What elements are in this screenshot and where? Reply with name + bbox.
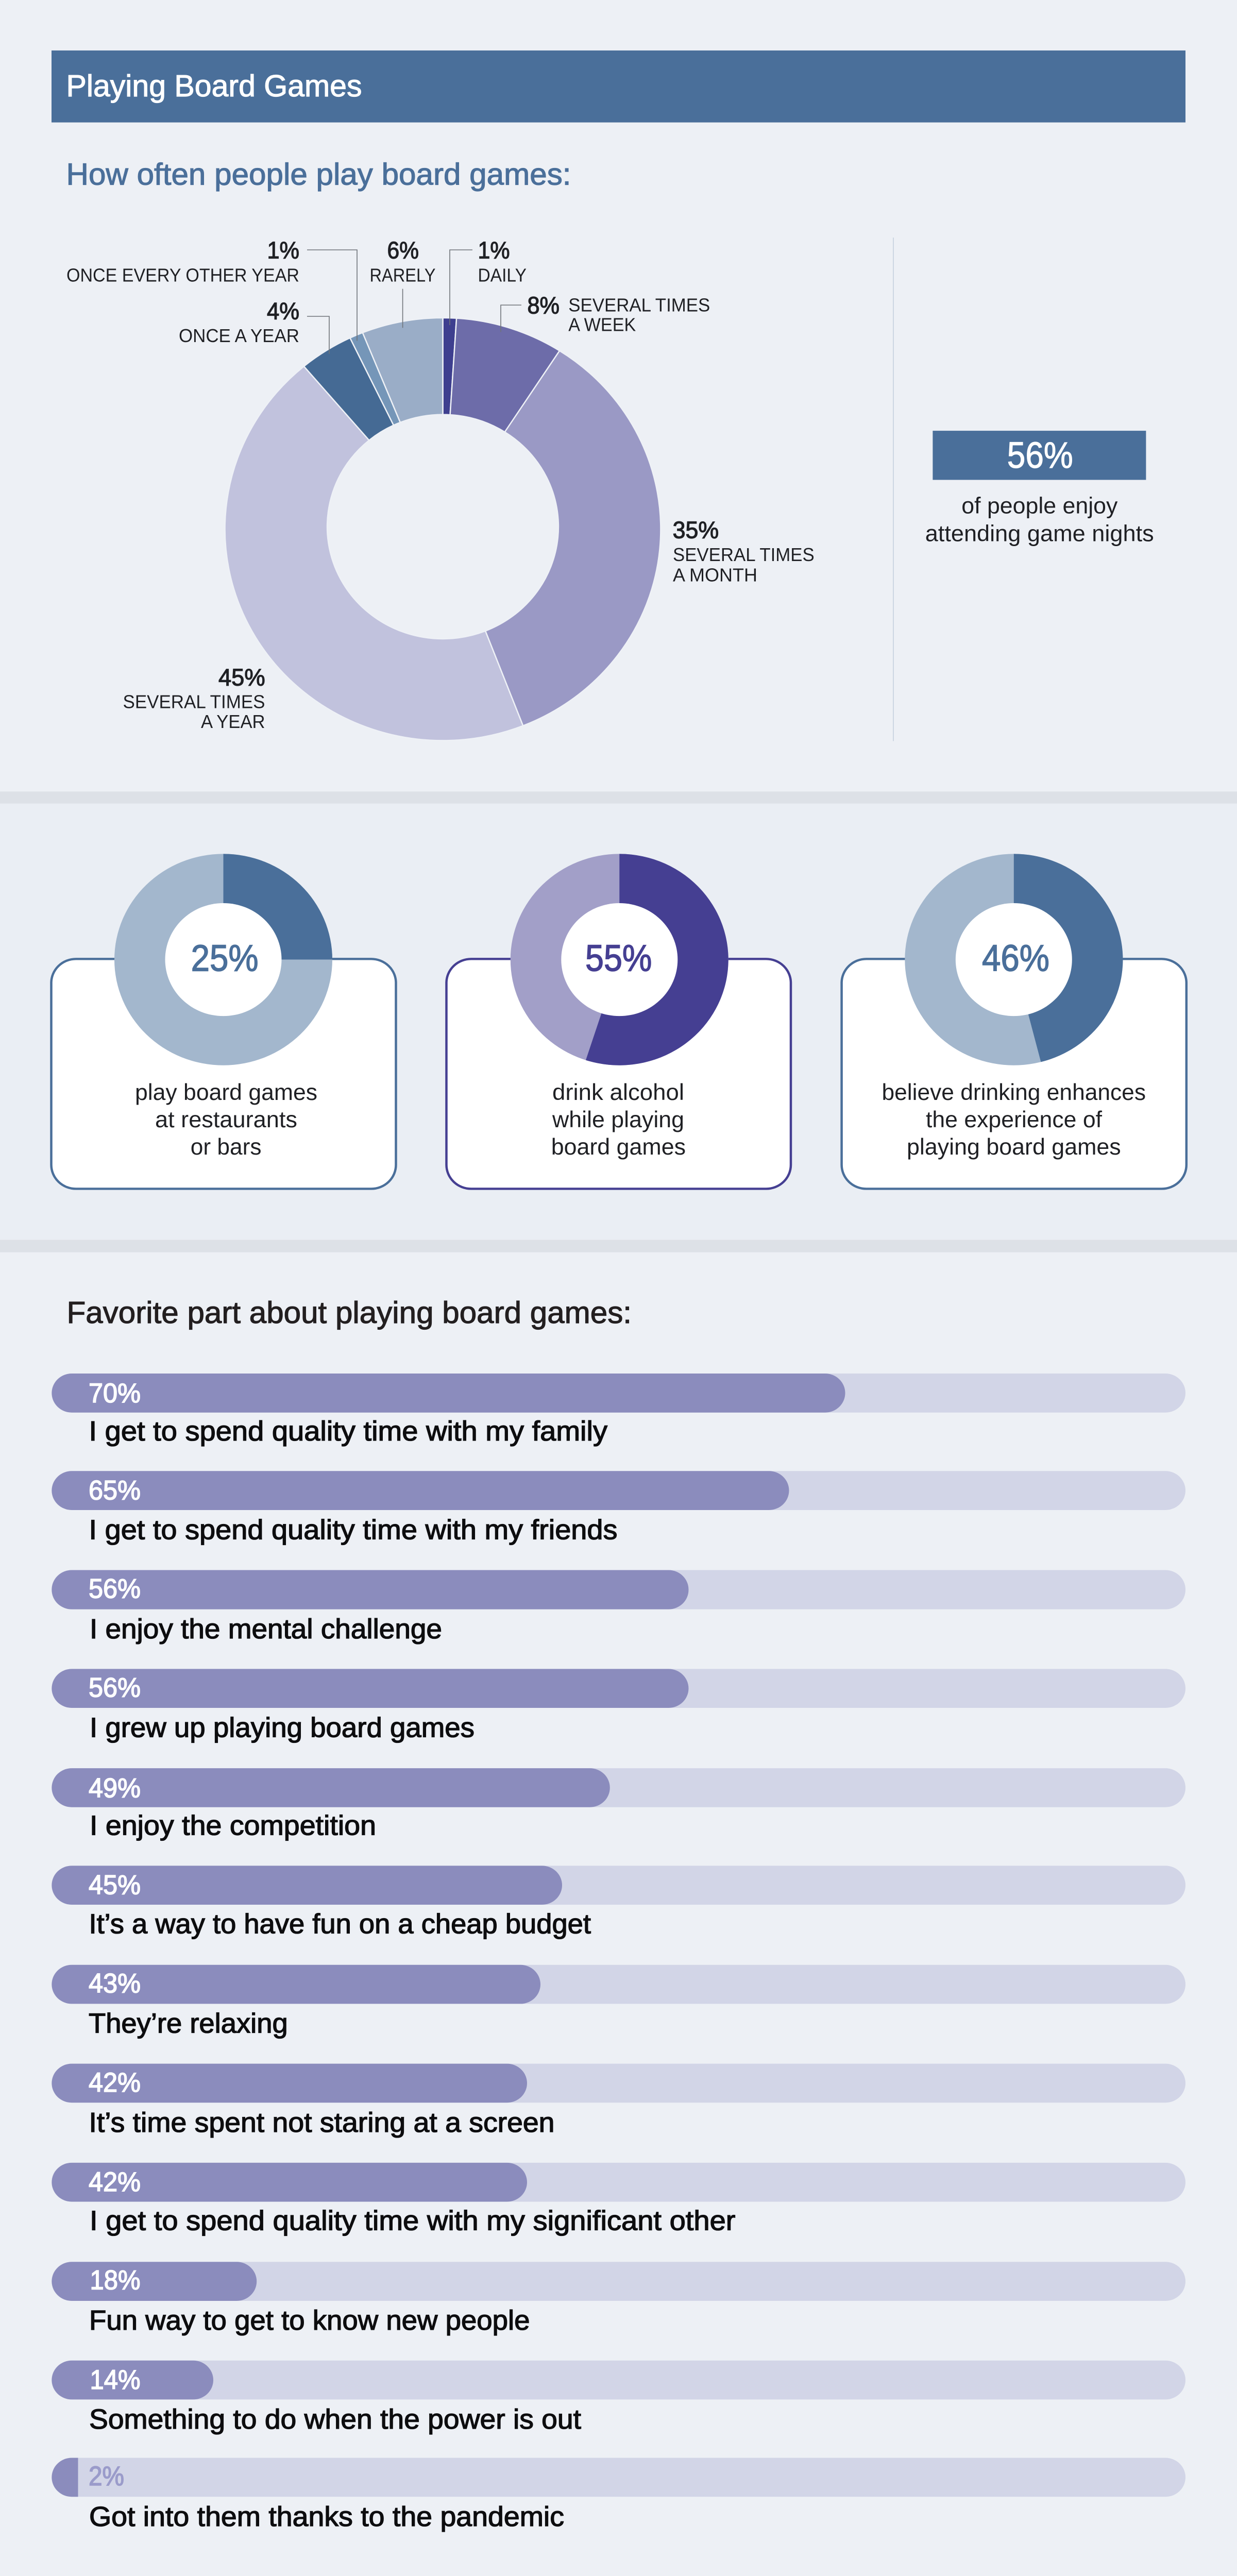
bar: 42% not staring at a screen: It’s time spent not staring at a screen <box>89 2108 554 2138</box>
description <box>882 1079 1146 1160</box>
card <box>842 959 1187 1189</box>
value: 46% <box>982 937 1049 979</box>
label: once every other year <box>66 237 357 341</box>
bar: 45% cheap budget: 45% <box>89 1870 141 1901</box>
bar: 65% friends <box>52 1471 1185 1545</box>
label: rarely: RARELY <box>370 265 435 285</box>
bar: 70% family: 70% <box>89 1379 141 1409</box>
title banner: Playing Board Games <box>66 69 362 103</box>
label: daily: DAILY <box>478 265 527 285</box>
donut labels and leader lines <box>66 237 815 732</box>
bar: 45% cheap budget: It’s a way to have fun on a cheap budget <box>89 1909 591 1939</box>
donut 25% <box>114 854 332 1065</box>
slice: several times a year 45% <box>225 366 523 740</box>
callout: 56% game nights: attending game nights <box>925 520 1154 547</box>
heading: favorite part: Favorite part about playing board games: <box>67 1296 632 1330</box>
label: rarely <box>370 237 436 328</box>
bar: 14% power out: Something to do when the power is out <box>89 2404 581 2435</box>
label: once a year: 4% <box>267 298 299 325</box>
bar: 49% competition: I enjoy the competition <box>90 1810 376 1841</box>
description: or bars <box>191 1134 261 1160</box>
description: while playing <box>552 1107 684 1132</box>
bar: 14% power out <box>52 2361 1185 2435</box>
bar: 43% relaxing: 43% <box>89 1969 141 1998</box>
bar: 56% mental challenge <box>52 1570 1185 1645</box>
label: several times a week: A WEEK <box>568 314 636 335</box>
label: several times a week: 8% <box>528 292 560 319</box>
label: once a year <box>179 298 329 354</box>
label: several times a week <box>501 292 710 335</box>
bar: 2% pandemic: Got into them thanks to the pandemic <box>89 2502 564 2532</box>
bar: 45% cheap budget <box>52 1866 1185 1939</box>
label: once a year: ONCE A YEAR <box>179 326 299 346</box>
bar: 49% competition: 49% <box>89 1773 141 1803</box>
callout: 56% game nights <box>925 431 1154 547</box>
bar: 14% power out: 14% <box>90 2365 140 2395</box>
panel: restaurants or bars 25% <box>52 854 396 1189</box>
bar: 43% relaxing <box>52 1965 1185 2039</box>
donut 55% <box>511 854 728 1065</box>
bar: 42% significant other: I get to spend quality time with my significant other <box>90 2206 736 2236</box>
label: once every other year: ONCE EVERY OTHER YEAR <box>66 265 299 285</box>
card <box>52 959 396 1189</box>
description: drink alcohol <box>552 1079 684 1105</box>
bar: 18% new people <box>52 2262 1185 2336</box>
label: several times a month: SEVERAL TIMES <box>673 544 815 565</box>
description: board games <box>551 1134 686 1160</box>
description: believe drinking enhances <box>882 1079 1146 1105</box>
card <box>446 959 791 1189</box>
description: playing board games <box>907 1134 1121 1160</box>
description: play board games <box>135 1079 317 1105</box>
label: several times a month <box>673 517 815 585</box>
title banner <box>52 50 1185 123</box>
bar: 56% grew up: 56% <box>89 1673 141 1703</box>
bar: 49% competition <box>52 1768 1185 1841</box>
value: 25% <box>191 937 259 979</box>
bar: 56% mental challenge: I enjoy the mental challenge <box>90 1614 442 1645</box>
label: once every other year: 1% <box>267 237 299 264</box>
label: several times a year: A YEAR <box>201 711 265 732</box>
bar: 70% family: I get to spend quality time with my family <box>89 1416 607 1447</box>
bar: 56% grew up: I grew up playing board games <box>90 1713 475 1743</box>
slice: daily 1% <box>443 318 456 415</box>
bar: 70% family <box>52 1374 1185 1447</box>
bar: 42% not staring at a screen: 42% <box>89 2068 141 2098</box>
description <box>551 1079 686 1160</box>
description: the experience of <box>926 1107 1102 1132</box>
label: several times a month: A MONTH <box>673 565 757 585</box>
value: 55% <box>585 937 652 979</box>
heading: how often people play: How often people play board games: <box>66 157 571 191</box>
bar: 2% pandemic: 2% <box>89 2462 124 2492</box>
label: daily <box>450 237 527 325</box>
bar: 42% significant other: 42% <box>89 2167 141 2197</box>
label: several times a month: 35% <box>673 517 719 544</box>
donut 46% <box>905 854 1123 1065</box>
bar: 56% grew up <box>52 1669 1185 1743</box>
callout: 56% game nights: 56% <box>1007 435 1073 476</box>
bar: 65% friends: 65% <box>89 1476 141 1505</box>
slice: several times a month 35% <box>485 351 660 726</box>
slice: several times a week 8% <box>450 318 560 432</box>
panel: drinking enhances 46% <box>842 854 1187 1189</box>
slice: rarely 6% <box>363 318 443 422</box>
label: several times a year: 45% <box>218 664 265 691</box>
description <box>135 1079 317 1160</box>
bar: 42% not staring at a screen <box>52 2064 1185 2138</box>
bar: 56% mental challenge: 56% <box>89 1574 141 1604</box>
callout: 56% game nights: of people enjoy <box>961 493 1118 518</box>
slice: once a year 4% <box>304 338 394 440</box>
bar: 18% new people: 18% <box>90 2265 140 2295</box>
bar: 43% relaxing: They’re relaxing <box>89 2008 288 2039</box>
donut chart: play frequency <box>225 318 660 740</box>
bar: 65% friends: I get to spend quality time with my friends <box>89 1515 617 1545</box>
label: daily: 1% <box>478 237 510 264</box>
label: rarely: 6% <box>387 237 419 264</box>
label: several times a year: SEVERAL TIMES <box>123 691 265 712</box>
panel: drink alcohol 55% <box>446 854 791 1189</box>
description: at restaurants <box>155 1107 297 1132</box>
slice: once every other year 1% <box>350 333 400 425</box>
bar: 18% new people: Fun way to get to know new people <box>89 2306 530 2336</box>
label: several times a year <box>123 664 265 732</box>
bar: 2% pandemic <box>52 2458 1185 2532</box>
bar: 42% significant other <box>52 2163 1185 2236</box>
bar chart: favorite part <box>52 1374 1185 2532</box>
label: several times a week: SEVERAL TIMES <box>568 295 710 315</box>
